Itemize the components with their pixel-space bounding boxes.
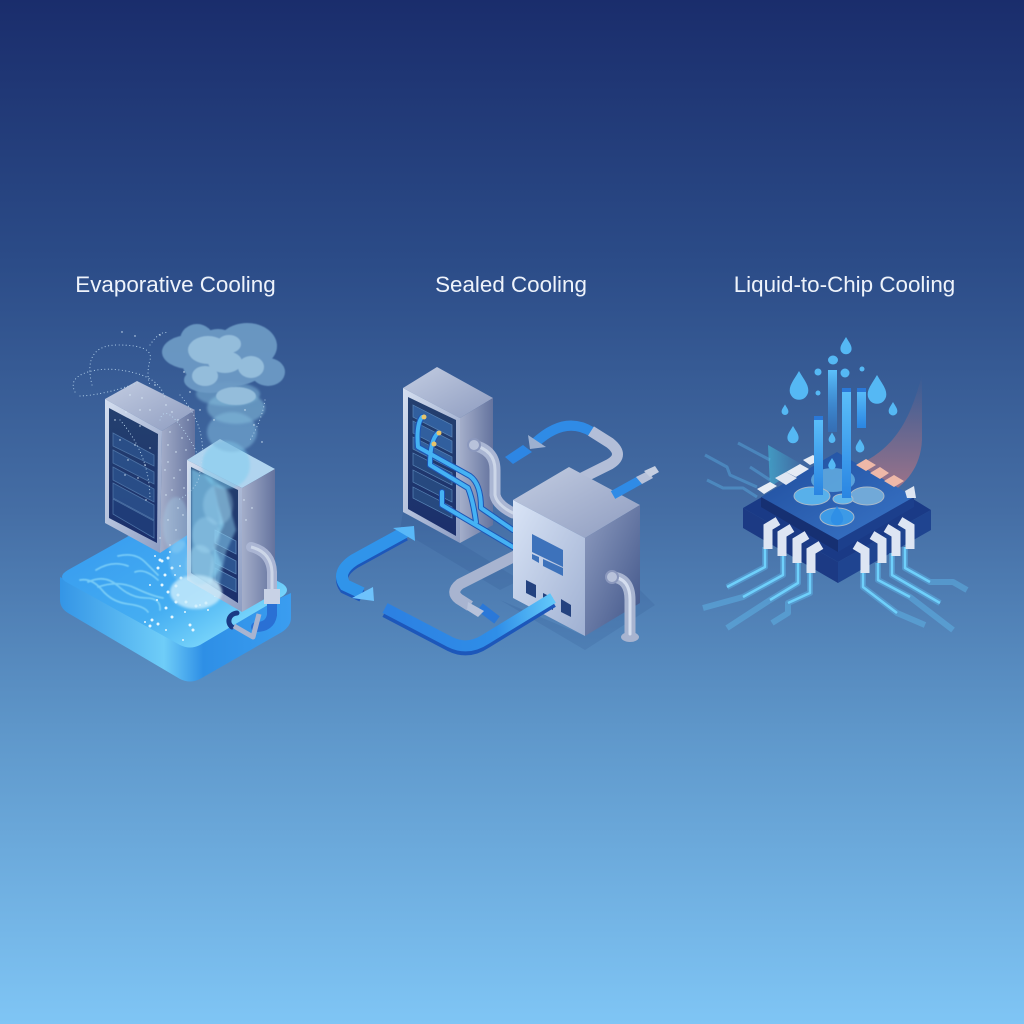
panel: evaporative cooling illustration [60, 323, 291, 682]
liquid columns [814, 370, 866, 498]
heated copper pads [856, 459, 904, 487]
title: Sealed Cooling: Sealed Cooling [435, 272, 587, 297]
cooling unit [513, 467, 640, 636]
lower circuit traces [703, 547, 967, 630]
microchip [743, 452, 931, 583]
evaporating plume column [163, 382, 265, 609]
floor shadows [400, 512, 655, 650]
top return arrow [505, 426, 618, 478]
top pins [757, 455, 916, 498]
server rack left [105, 381, 195, 553]
water splash [145, 552, 222, 640]
grey pipes [455, 439, 517, 606]
cool plume [768, 445, 803, 487]
blue coolant tubes [418, 414, 513, 547]
water pipe assembly [229, 547, 280, 637]
coolant pools [794, 468, 884, 526]
panel: liquid-to-chip cooling illustration [703, 337, 967, 630]
title: Liquid-to-Chip Cooling: Liquid-to-Chip Cooling [734, 272, 955, 297]
title: Evaporative Cooling: Evaporative Cooling [75, 272, 276, 297]
steam cloud [162, 323, 285, 405]
server rack [403, 367, 493, 543]
server rack right [187, 439, 275, 612]
panel: sealed cooling illustration [342, 367, 659, 650]
water basin platform [60, 521, 291, 682]
lower flow arrow [385, 598, 553, 650]
left loop arrow [342, 526, 415, 601]
water droplets [782, 337, 897, 525]
right outlet pipe [613, 466, 659, 495]
bottom pins [768, 521, 910, 573]
heat plume [850, 375, 922, 505]
unit pipe [606, 571, 639, 642]
water ripples [80, 555, 163, 612]
mist dots [73, 332, 265, 545]
upper circuit traces [705, 443, 770, 497]
